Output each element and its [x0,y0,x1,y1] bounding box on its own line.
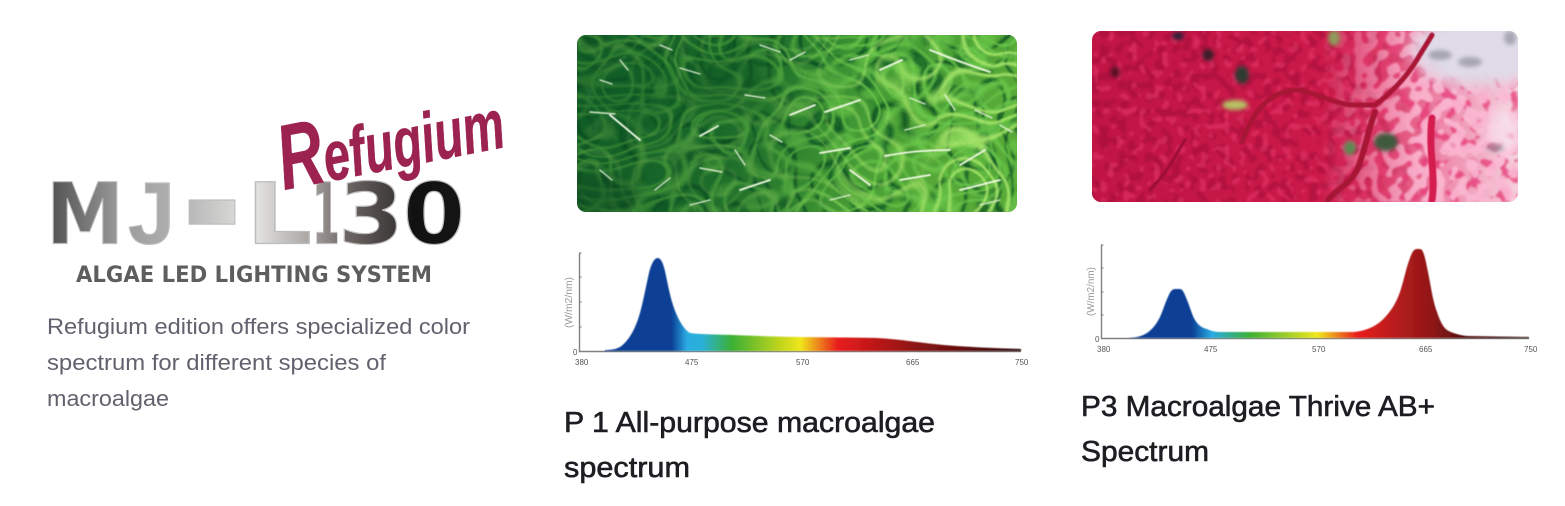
x-axis ticks: 380 [1097,345,1111,354]
logo tagline: ALGAE LED LIGHTING SYSTEM [76,263,432,288]
x-axis ticks: 0 [573,348,578,357]
logo wordmark MJ-L130: 1 [312,166,340,264]
heading: P3: Spectrum [1081,436,1209,468]
logo script Refugium: Refugium [268,66,512,210]
heading: P3: P3 Macroalgae Thrive AB+ [1081,391,1435,423]
x-axis ticks: 380 [575,358,589,367]
x-axis ticks [573,348,1029,367]
x-axis ticks: 750 [1524,345,1538,354]
x-axis ticks: 570 [1312,345,1326,354]
logo wordmark MJ-L130: 3 [338,166,404,264]
chart axes [1102,245,1529,338]
logo wordmark MJ-L130: 0 [403,166,465,264]
x-axis ticks: 475 [1204,345,1218,354]
description text: Refugium edition offers specialized color [47,314,470,339]
chart: P1 spectrum [564,253,1029,367]
logo: MJ-L130 Refugium [46,66,512,302]
x-axis ticks: 665 [1419,345,1433,354]
description text: macroalgae [47,386,169,411]
spectrum area [605,258,1021,351]
logo wordmark MJ-L130: - [181,104,243,302]
x-axis ticks: 0 [1095,335,1100,344]
heading: P1: P 1 All-purpose macroalgae [564,407,935,439]
x-axis ticks: 570 [796,358,810,367]
x-axis ticks: 475 [685,358,699,367]
x-axis ticks [1095,335,1538,354]
logo wordmark MJ-L130: J [128,164,175,262]
description text: spectrum for different species of [47,350,387,375]
chart: P3 spectrum [1086,245,1538,354]
chart axes [580,253,1021,352]
x-axis ticks: 750 [1015,358,1029,367]
spectrum area [1130,249,1529,338]
logo wordmark MJ-L130: L [246,166,312,264]
heading: P1: spectrum [564,452,690,484]
photo: green macroalgae [560,35,1017,217]
y-axis label: (W/m2/nm) [1086,267,1097,316]
x-axis ticks: 665 [906,358,920,367]
logo wordmark MJ-L130 [46,104,465,302]
photo: red macroalgae [1092,31,1518,202]
logo wordmark MJ-L130: M [46,166,124,264]
y-axis label: (W/m2/nm) [564,277,575,328]
